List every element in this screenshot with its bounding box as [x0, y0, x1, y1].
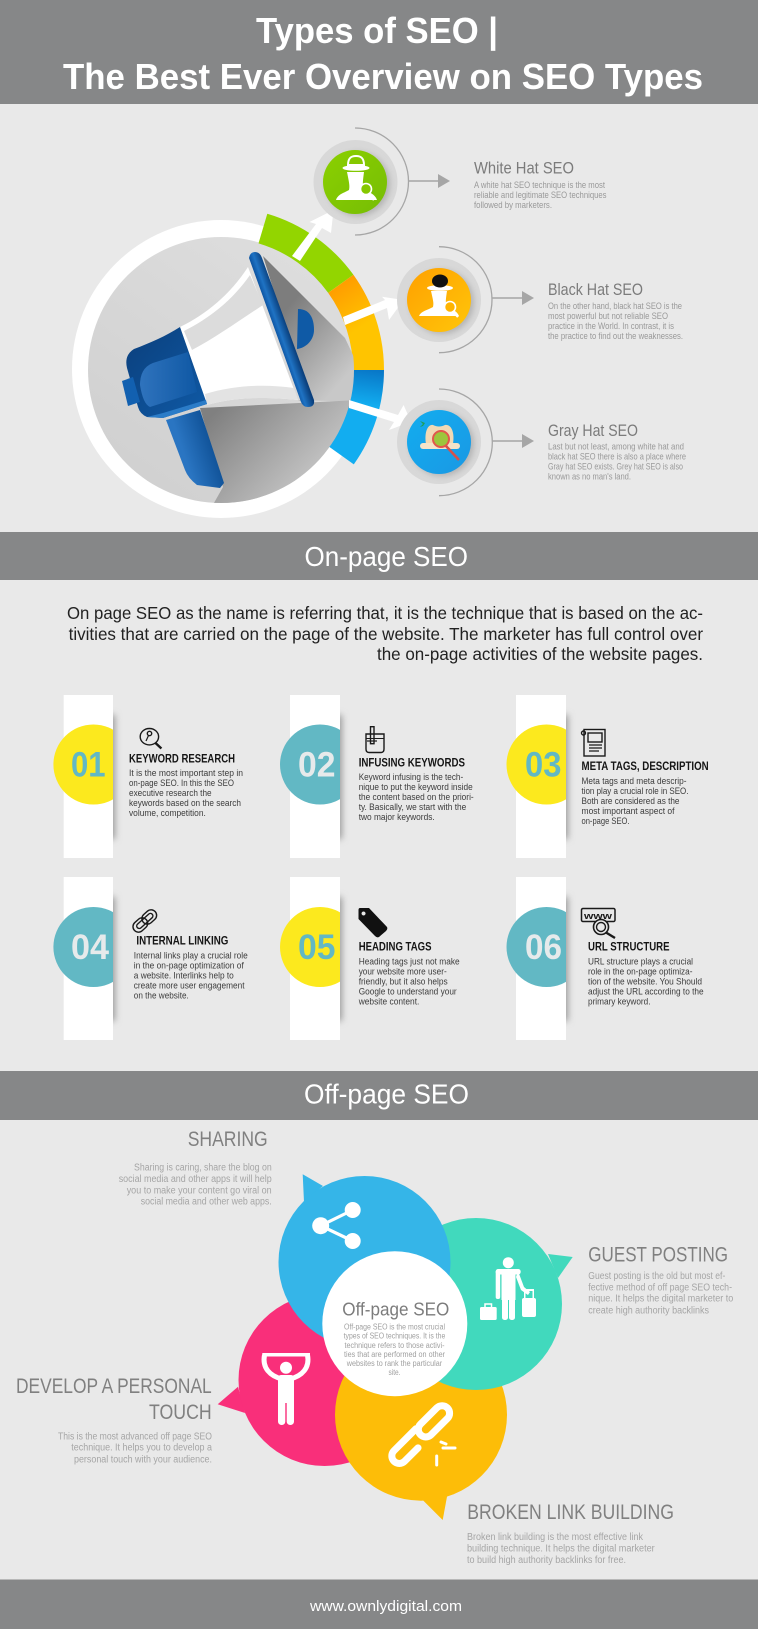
body — [359, 772, 474, 823]
number badge: 05 — [298, 928, 336, 967]
halo and arc — [397, 247, 492, 353]
body: adjust the URL according to the — [588, 986, 704, 998]
halo and arc — [397, 389, 492, 496]
body: tion of the website. You Should — [588, 976, 702, 988]
description: Gray hat SEO exists. Grey hat SEO is also — [548, 462, 683, 472]
on-page section banner — [0, 532, 758, 580]
develop a personal touch text block: technique. It helps you to develop a — [71, 1442, 212, 1454]
body: friendly, but it also helps — [359, 976, 448, 988]
description: reliable and legitimate SEO techniques — [474, 190, 607, 200]
develop a personal touch text block: personal touch with your audience. — [74, 1454, 212, 1465]
description — [548, 301, 683, 341]
icon: traveller with luggage — [480, 1257, 536, 1320]
icon: broken chain — [389, 1403, 455, 1467]
body: Keyword infusing is the tech- — [359, 772, 463, 783]
strip — [290, 695, 342, 858]
icon: person holding banner — [262, 1353, 310, 1425]
body: on the website. — [134, 990, 189, 1002]
center description: websites to rank the particular — [346, 1359, 442, 1368]
footer banner: www.ownlydigital.com — [309, 1599, 462, 1615]
icon: magnifier with key — [140, 728, 161, 748]
number badge — [53, 907, 113, 987]
number badge — [506, 907, 566, 987]
card 05: heading tags — [280, 877, 460, 1040]
icon: chain link — [131, 908, 159, 934]
card 06: url structure — [506, 877, 704, 1040]
teal bubble: guest posting — [390, 1218, 573, 1390]
off-page section banner: Off-page SEO — [304, 1078, 469, 1110]
description — [548, 442, 686, 482]
connector arrow — [408, 174, 450, 188]
icon: beaker with stirrer — [366, 727, 384, 752]
white ring — [72, 220, 370, 518]
develop a personal touch text block: TOUCH — [149, 1400, 212, 1424]
body: Meta tags and meta descrip- — [582, 776, 686, 787]
body: most important aspect of — [582, 806, 675, 817]
body: in the on-page optimization of — [134, 960, 244, 972]
broken link building text block: Broken link building is the most effective link — [467, 1532, 644, 1543]
number badge — [506, 724, 566, 804]
number badge — [280, 907, 340, 987]
card 03: meta tags, description — [506, 695, 709, 858]
body: on-page SEO. In this the SEO — [129, 778, 234, 789]
card 02: infusing keywords — [280, 695, 474, 858]
sharing text block: social media and other apps it will help — [119, 1174, 272, 1185]
header banner — [0, 0, 758, 104]
icon: black hat person — [407, 268, 471, 332]
broken link building text block: BROKEN LINK BUILDING — [467, 1500, 674, 1524]
description: A white hat SEO technique is the most — [474, 180, 605, 190]
on-page section banner: On-page SEO — [304, 541, 468, 572]
body: Both are considered as the — [582, 796, 680, 807]
body: create more user engagement — [134, 980, 245, 992]
broken link building text block: to build high authority backlinks for free. — [467, 1555, 626, 1566]
number badge: 06 — [525, 928, 562, 967]
heading: META TAGS, DESCRIPTION — [582, 761, 709, 773]
arrow to black hat — [343, 297, 404, 325]
heading: INFUSING KEYWORDS — [359, 757, 465, 769]
strip — [290, 877, 342, 1040]
number badge: 01 — [71, 746, 106, 785]
number badge — [280, 724, 340, 804]
panel: megaphone hero illustration — [72, 210, 411, 518]
heading: Black Hat SEO — [548, 281, 643, 299]
footer banner — [0, 1580, 758, 1629]
title: The Best Ever Overview on SEO Types — [63, 56, 703, 97]
body: a website. Interlinks help to — [134, 970, 234, 982]
description: known as no man's land. — [548, 472, 631, 482]
sharing text block — [119, 1127, 272, 1208]
icon: share nodes — [312, 1202, 361, 1249]
icon: document — [582, 730, 605, 756]
broken link building text block — [467, 1500, 674, 1566]
body: tion play a crucial role in SEO. — [582, 786, 688, 797]
description: Last but not least, among white hat and — [548, 442, 684, 452]
body: ty. Basically, we start with the — [359, 802, 466, 813]
arrow to gray hat — [349, 400, 411, 430]
center description: types of SEO techniques. It is the — [344, 1332, 445, 1340]
body: Internal links play a crucial role — [134, 950, 248, 962]
body: executive research the — [129, 788, 212, 799]
heading: URL STRUCTURE — [588, 942, 670, 954]
center white circle — [322, 1251, 467, 1396]
pink bubble: personal touch — [218, 1294, 410, 1466]
colored arc segments — [258, 214, 384, 464]
body — [129, 768, 243, 819]
number badge — [53, 724, 113, 804]
body: on-page SEO. — [582, 816, 630, 827]
strip — [64, 695, 115, 858]
center description: site. — [388, 1368, 400, 1377]
body: role in the on-page optimiza- — [588, 966, 692, 978]
off-page bubble diagram — [218, 1174, 573, 1520]
on-page intro paragraph: tivities that are carried on the page of the website. The marketer has full control over — [69, 624, 703, 644]
body: the content based on the priori- — [359, 792, 474, 803]
title — [63, 10, 703, 97]
center description: ties that are performed on other — [344, 1350, 445, 1359]
guest posting text block: fective method of off page SEO tech- — [588, 1282, 732, 1293]
description: practice in the World. In contrast, it is — [548, 321, 674, 331]
body — [582, 776, 688, 827]
card 01: keyword research — [53, 695, 243, 858]
body: Google to understand your — [359, 986, 457, 998]
develop a personal touch text block: This is the most advanced off page SEO — [58, 1431, 212, 1442]
sharing text block: social media and other web apps. — [141, 1196, 272, 1208]
body: URL structure plays a crucial — [588, 956, 693, 968]
card 04: internal linking — [53, 877, 248, 1040]
heading: KEYWORD RESEARCH — [129, 753, 235, 765]
body: Heading tags just not make — [359, 956, 460, 968]
panel: white hat seo — [314, 128, 607, 235]
guest posting text block: nique. It helps the digital marketer to — [588, 1294, 734, 1304]
description: On the other hand, black hat SEO is the — [548, 301, 682, 311]
on-page intro paragraph: On page SEO as the name is referring that, it is the technique that is based on the ac- — [67, 603, 703, 623]
broken link building text block: building technique. It helps the digital marketer — [467, 1544, 655, 1554]
blue bubble: sharing — [278, 1174, 450, 1348]
body: primary keyword. — [588, 996, 650, 1008]
heading: Gray Hat SEO — [548, 422, 638, 440]
guest posting text block: Guest posting is the old but most ef- — [588, 1271, 725, 1282]
strip — [516, 695, 568, 858]
megaphone — [122, 252, 360, 510]
connector arrow — [492, 434, 534, 448]
halo and arc — [314, 128, 408, 235]
body: It is the most important step in — [129, 768, 243, 779]
body: your website more user- — [359, 966, 447, 978]
gray disc — [88, 237, 354, 503]
number badge: 04 — [71, 928, 110, 967]
description — [474, 180, 607, 210]
heading: INTERNAL LINKING — [136, 936, 228, 948]
on-page intro paragraph — [67, 603, 703, 664]
body — [134, 950, 248, 1002]
guest posting text block: create high authority backlinks — [588, 1305, 709, 1316]
sharing text block: you to make your content go viral on — [127, 1185, 272, 1196]
sharing text block: Sharing is caring, share the blog on — [134, 1162, 272, 1174]
connector arrow — [492, 291, 534, 305]
icon: www magnifier: www — [583, 911, 613, 922]
number badge: 02 — [298, 746, 336, 785]
strip — [64, 877, 115, 1040]
body — [358, 956, 460, 1008]
icon: white hat person — [323, 150, 387, 214]
body: two major keywords. — [359, 812, 435, 823]
panel: gray hat seo — [397, 389, 686, 496]
off-page section banner — [0, 1071, 758, 1120]
center heading: Off-page SEO — [342, 1299, 449, 1320]
description: most powerful but not reliable SEO — [548, 311, 668, 321]
strip — [516, 877, 568, 1040]
icon: www magnifier — [582, 908, 615, 938]
heading: HEADING TAGS — [359, 942, 432, 954]
body: keywords based on the search — [129, 798, 241, 809]
body: website content. — [358, 996, 419, 1008]
guest posting text block — [588, 1243, 734, 1316]
panel: black hat seo — [397, 247, 683, 353]
arrow to white hat — [292, 210, 334, 261]
description: the practice to find out the weaknesses. — [548, 331, 683, 341]
icon: gray hat magnifier — [407, 410, 471, 474]
center description: Off-page SEO is the most crucial — [344, 1322, 445, 1332]
body: volume, competition. — [129, 808, 206, 819]
title: Types of SEO | — [256, 10, 498, 52]
yellow bubble: broken link — [335, 1329, 507, 1520]
center description: technique refers to those activi- — [344, 1341, 445, 1350]
icon: tag — [358, 908, 387, 937]
body: nique to put the keyword inside — [359, 782, 473, 793]
center description — [344, 1322, 445, 1377]
description: followed by marketers. — [474, 200, 552, 210]
heading: White Hat SEO — [474, 160, 574, 178]
body — [588, 956, 704, 1008]
on-page intro paragraph: the on-page activities of the website pages. — [377, 644, 703, 664]
description: black hat SEO there is also a place where — [548, 452, 686, 462]
number badge: 03 — [525, 746, 561, 785]
develop a personal touch text block: DEVELOP A PERSONAL — [16, 1374, 212, 1398]
sharing text block: SHARING — [188, 1127, 268, 1151]
develop a personal touch text block — [16, 1374, 212, 1465]
